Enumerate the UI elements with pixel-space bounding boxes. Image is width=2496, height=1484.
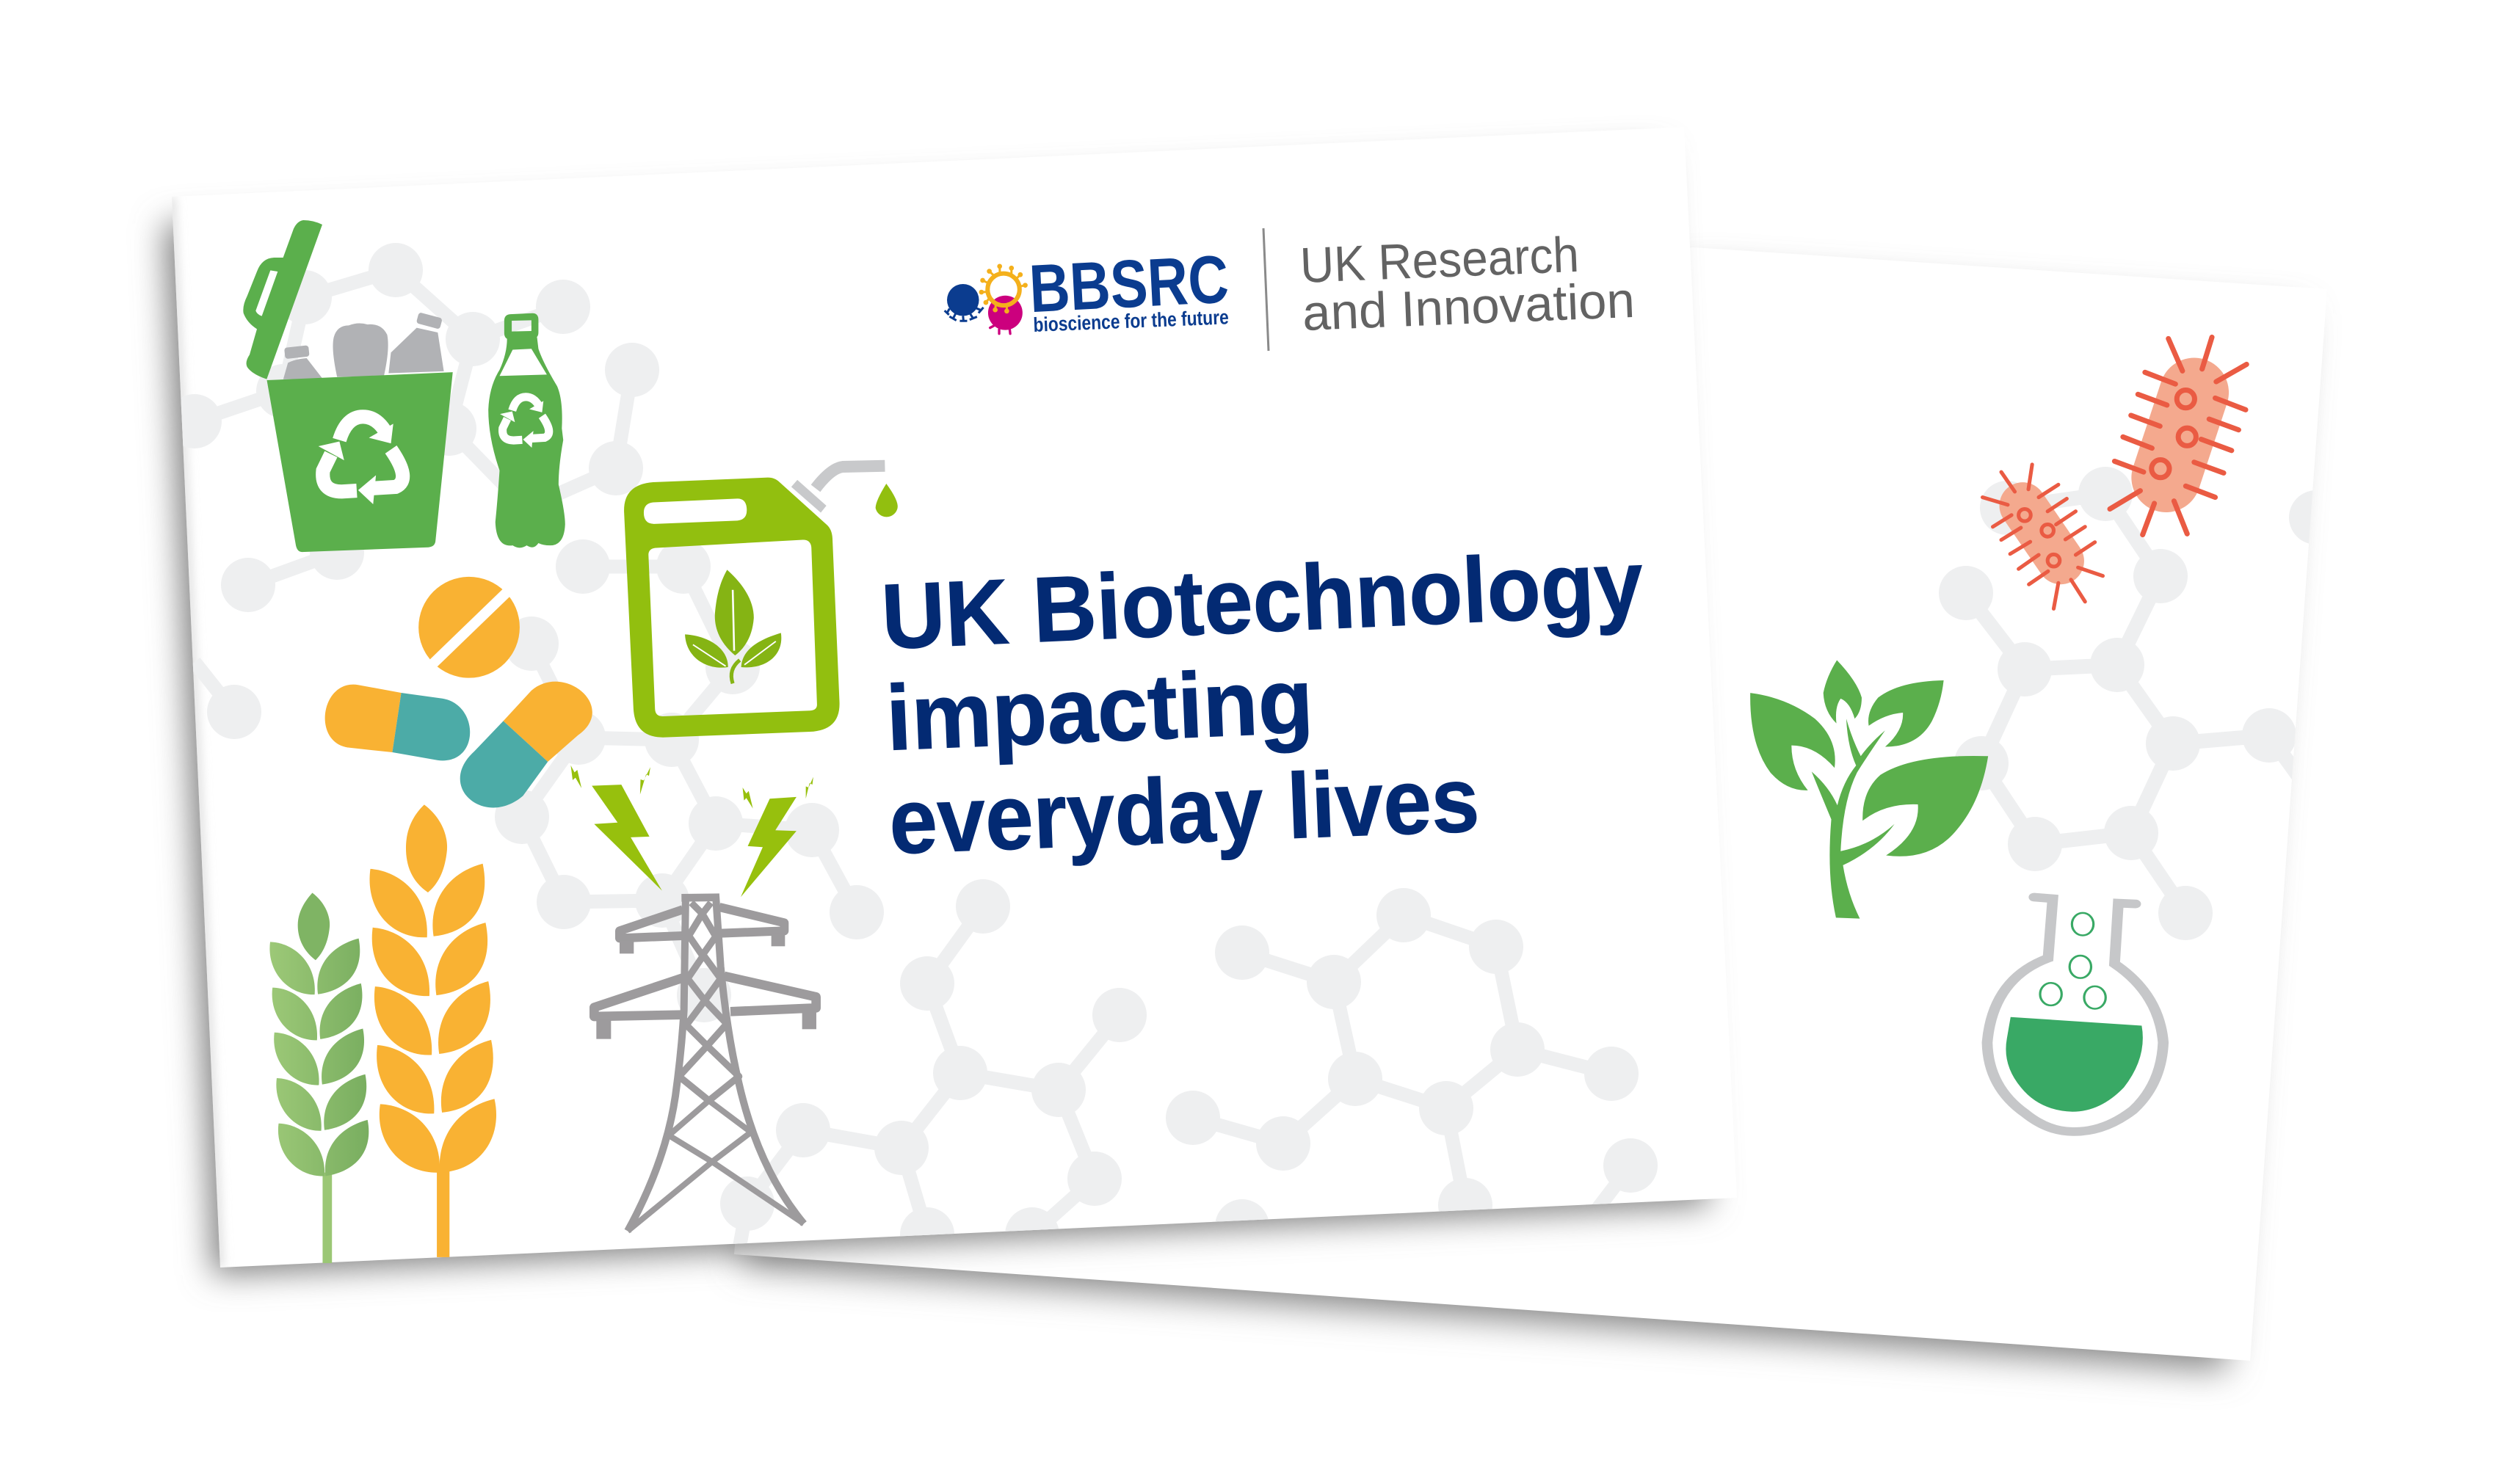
icon: yellow wheat	[370, 804, 496, 1257]
icon: recycled bottle	[488, 313, 565, 548]
logo: BBSRC	[945, 241, 1230, 336]
title: UK Biotechnology	[879, 531, 1645, 669]
icon: green plant	[1750, 661, 1988, 919]
logo wordmark: BBSRC	[1028, 241, 1230, 327]
icon: round tablet	[418, 577, 520, 678]
front cover molecule pattern	[167, 243, 1658, 1277]
panel: back cover	[734, 247, 2343, 1370]
title	[879, 531, 1645, 873]
logo: UK Research and Innovation: UK Research	[1299, 227, 1580, 294]
logo: UK Research and Innovation	[1299, 227, 1636, 341]
back cover sheet	[734, 247, 2327, 1361]
back cover shadow	[741, 273, 2301, 1370]
icon: green wheat	[269, 892, 369, 1263]
logo divider	[1263, 228, 1269, 351]
back cover molecule pattern	[1939, 467, 2343, 940]
logo microbes	[945, 264, 1028, 334]
icon: large bacterium	[2110, 337, 2246, 535]
title: everyday lives	[888, 747, 1481, 873]
panel: front cover	[164, 127, 1737, 1277]
title: impacting	[884, 649, 1316, 770]
icon: diagonal capsule	[460, 682, 592, 807]
infographic: two overlapping report covers	[142, 197, 2324, 1392]
logo: UK Research and Innovation: and Innovation	[1302, 272, 1636, 341]
logo strapline: bioscience for the future	[1033, 305, 1229, 336]
icon: horizontal capsule	[325, 685, 470, 760]
front cover shadow	[164, 153, 1709, 1275]
front cover sheet	[172, 127, 1737, 1267]
icon: lightning bolts	[570, 765, 813, 897]
icon: recycling bin	[243, 220, 453, 552]
icon: small bacterium	[1983, 465, 2103, 608]
icon: biofuel jerry can	[624, 466, 898, 738]
icon: laboratory flask	[1987, 897, 2163, 1132]
icon: electricity pylon	[594, 895, 816, 1231]
